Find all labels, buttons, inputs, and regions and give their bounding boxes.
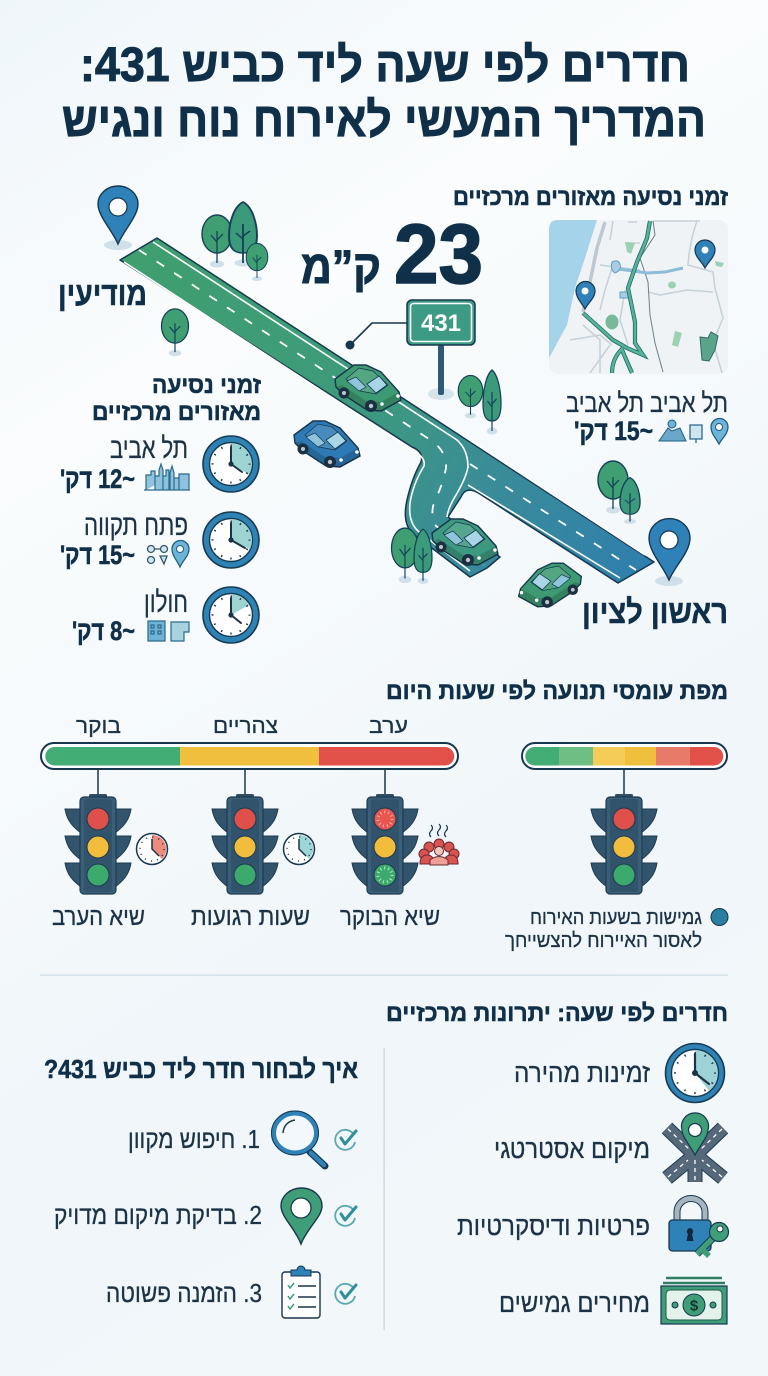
icon: lock and key: [669, 1198, 728, 1256]
panel: how to choose: [44, 1054, 358, 1318]
row: Tel Aviv: ~12 דק': [60, 464, 135, 494]
time: ~15 דק': [574, 416, 653, 446]
icon: clock: [666, 1044, 724, 1102]
small icons: [659, 418, 728, 444]
time labels: [76, 713, 408, 738]
title: המדריך המעשי לאירוח נוח ונגיש: [62, 94, 706, 147]
row: Holon: ~8 דק': [72, 616, 135, 646]
pin: Modiin: [98, 186, 138, 250]
pin: Rishon: [649, 519, 690, 586]
panel: travel times list: [60, 372, 261, 646]
heading: [92, 372, 261, 426]
heading: איך לבחור חדר ליד כביש 431?: [44, 1054, 358, 1084]
distance: 23 km: 23: [394, 207, 483, 301]
panel: key advantages: [386, 1000, 728, 1324]
text: flexible prices: מחירים גמישים: [499, 1288, 650, 1318]
traffic light: flexible: [591, 794, 657, 894]
time labels: ערב: [369, 713, 408, 738]
step 2: 2. בדיקת מיקום מדויק: [54, 1200, 262, 1230]
heading: זמני נסיעה מאזורים מרכזיים: [453, 184, 728, 211]
traffic light: quiet hours: [212, 794, 278, 894]
title: [62, 39, 706, 147]
state labels: שיא הבוקר: [340, 903, 440, 931]
note: גמישות בשעות האירוח: [530, 907, 702, 929]
note: לאסור האיירוח להצשייחך: [505, 930, 702, 952]
step 2: [54, 1188, 356, 1244]
title: חדרים לפי שעה ליד כביש 431:: [80, 39, 690, 92]
traffic light: evening peak: [65, 794, 131, 894]
text: quick availability: זמינות מהירה: [514, 1058, 650, 1088]
state labels: [52, 903, 440, 931]
icon: red clock: [136, 834, 168, 864]
distance: 23 km: [301, 207, 483, 301]
trees near ramp: [392, 528, 432, 584]
row: Petah Tikva: פתח תקווה: [84, 510, 188, 542]
road map illustration: route 431: [58, 186, 728, 630]
state labels: שיא הערב: [52, 903, 145, 931]
time labels: בוקר: [76, 713, 121, 738]
load bar: main: [41, 743, 458, 769]
heading: מפת עומסי תנועה לפי שעות היום: [386, 678, 728, 705]
icon: teal clock: [284, 834, 314, 864]
car: green on ramp: [432, 519, 498, 566]
text: privacy: פרטיות ודיסקרטיות: [457, 1211, 650, 1241]
traffic light: morning peak: [352, 794, 418, 894]
step 3: [106, 1266, 356, 1318]
map: [549, 220, 728, 374]
connectors: [98, 769, 624, 797]
step 3: 3. הזמנה פשוטה: [106, 1278, 262, 1308]
note: [505, 907, 728, 952]
row: Petah Tikva: ~15 דק': [60, 540, 135, 570]
label: Rishon LeZion: ראשון לציון: [582, 593, 728, 630]
trees near Rishon: [598, 461, 640, 524]
text: strategic location: מיקום אסטרטגי: [494, 1134, 650, 1164]
load bar: secondary: [522, 743, 727, 769]
road: [120, 238, 654, 583]
car: green on road: [335, 365, 401, 412]
label: Modiin: מודיעין: [58, 275, 147, 312]
distance: 23 km: ק”מ: [301, 240, 381, 293]
car: green below road: [519, 563, 581, 608]
heading: מאזורים מרכזיים: [92, 399, 261, 426]
step 1: [128, 1111, 356, 1166]
row: Holon: חולון: [144, 587, 188, 619]
icon: junction with pin: [667, 1113, 723, 1182]
road sign 431: 431: [421, 310, 461, 337]
panel: travel times map: [453, 184, 728, 446]
icon: cash: [661, 1278, 727, 1324]
row: Petah Tikva: [60, 510, 259, 570]
car: blue: [294, 421, 360, 468]
time labels: צהריים: [213, 713, 278, 738]
step 1: 1. חיפוש מקוון: [128, 1124, 260, 1154]
row: Tel Aviv: תל אביב: [110, 433, 188, 465]
icon: crowd: [419, 824, 459, 865]
tree: [162, 309, 188, 356]
trees near Modiin: [202, 202, 268, 281]
road sign 431: [346, 300, 475, 400]
row: Tel Aviv: [60, 433, 259, 494]
heading: חדרים לפי שעה: יתרונות מרכזיים: [386, 1000, 728, 1027]
panel: traffic load map: [41, 678, 728, 952]
city name: תל אביב תל אביב: [566, 388, 728, 418]
trees near sign: [458, 370, 501, 434]
state labels: שעות רגועות: [191, 903, 310, 931]
heading: זמני נסיעה: [152, 372, 261, 399]
row: Holon: [72, 587, 259, 646]
icon: cash: $: [690, 1298, 699, 1314]
